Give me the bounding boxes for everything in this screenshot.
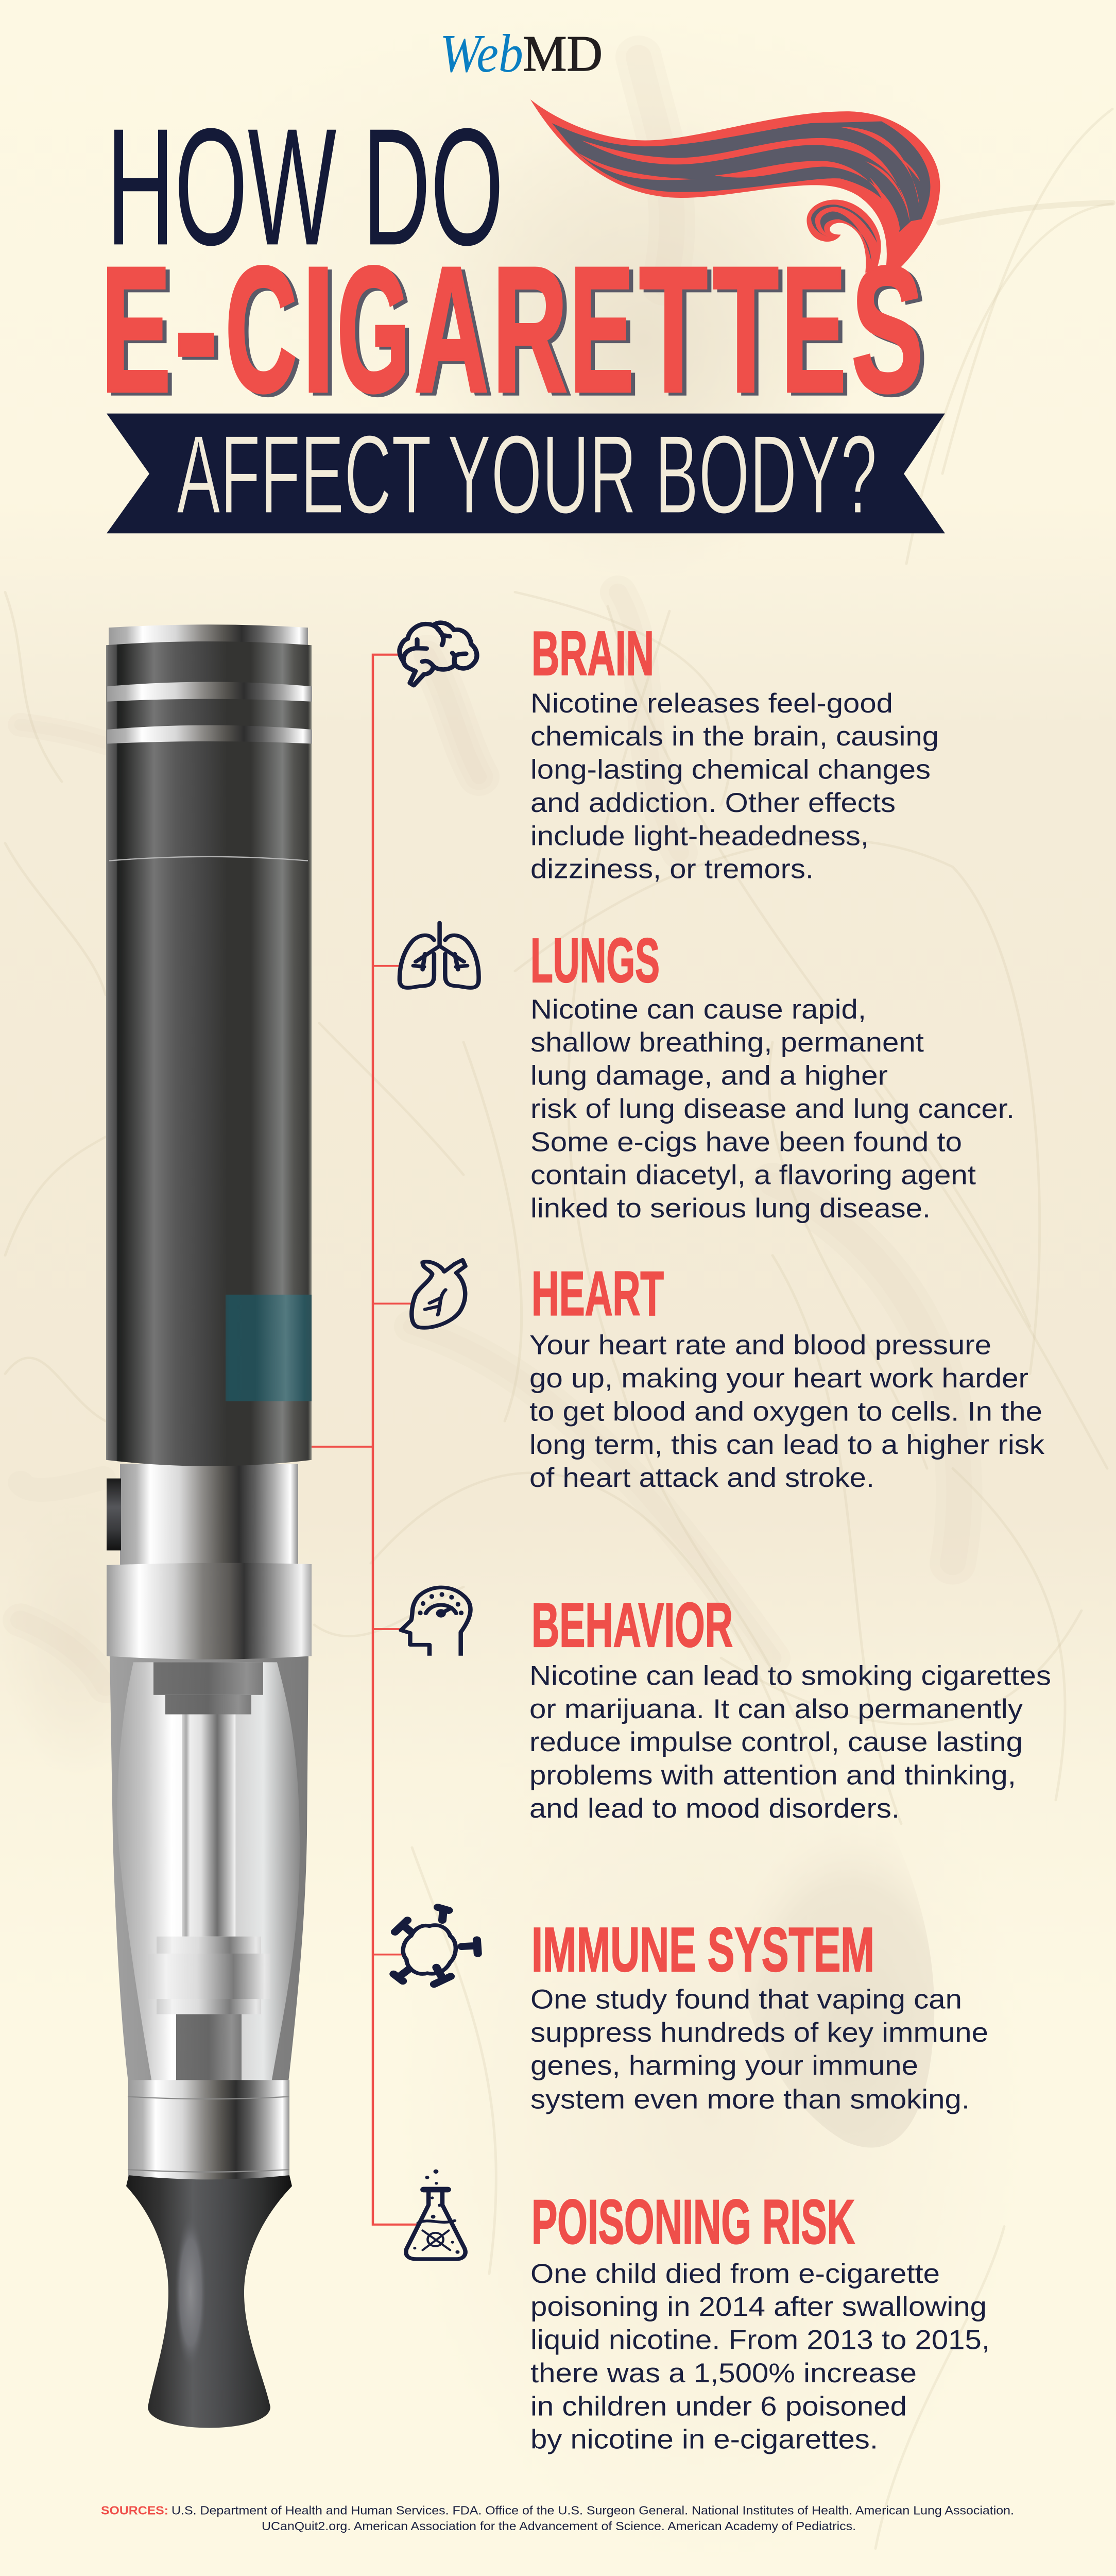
smoke swirl illustration <box>530 99 940 273</box>
title: e-cigarettes: C <box>225 229 297 429</box>
text: behavior: reduce impulse control, cause lasting <box>529 1726 1023 1757</box>
text: lungs: linked to serious lung disease. <box>530 1193 931 1223</box>
text: immune system: suppress hundreds of key immune <box>530 2017 988 2047</box>
icon: brain <box>400 623 477 685</box>
title: e-cigarettes: E <box>570 229 634 429</box>
upper inner fitting <box>153 1662 263 1695</box>
title: e-cigarettes: S <box>851 229 923 429</box>
title: e-cigarettes: G <box>341 232 414 432</box>
title: e-cigarettes: E <box>574 232 638 432</box>
text: brain: and addiction. Other effects <box>530 787 896 818</box>
icon: head with gauge <box>401 1587 471 1656</box>
sources <box>101 2504 1014 2533</box>
mouthpiece <box>126 2175 292 2428</box>
panel: immune system <box>393 1907 988 2114</box>
text: lungs: Some e-cigs have been found to <box>530 1126 962 1157</box>
text: poisoning risk: in children under 6 poisoned <box>530 2391 907 2421</box>
icon: lungs <box>400 923 479 988</box>
text: brain: dizziness, or tremors. <box>530 854 814 884</box>
text: immune system: system even more than smoking. <box>530 2084 970 2114</box>
ring 2 <box>107 725 312 744</box>
heading: brain: BRAIN <box>531 618 654 688</box>
heading: lungs: LUNGS <box>530 925 660 995</box>
side button <box>107 1479 121 1550</box>
title: e-cigarettes: S <box>855 232 928 432</box>
neck <box>120 1464 298 1567</box>
text: lungs: shallow breathing, permanent <box>530 1027 924 1058</box>
title: e-cigarettes: G <box>337 229 410 429</box>
battery body <box>106 641 312 1466</box>
panel: lungs <box>400 923 1015 1223</box>
title: how do: HOW DO <box>107 94 504 280</box>
ring 1 <box>107 682 312 702</box>
text: brain <box>530 688 939 884</box>
panel: poisoning risk <box>406 2170 990 2454</box>
text: lungs: risk of lung disease and lung cancer. <box>530 1093 1015 1124</box>
center tube <box>182 1715 236 1937</box>
title: e-cigarettes: T <box>717 232 783 432</box>
collar <box>107 1563 312 1659</box>
icon: virus <box>393 1907 478 1984</box>
title: e-cigarettes: I <box>306 232 339 432</box>
coil fitting <box>157 1937 261 2014</box>
glass highlight <box>117 1662 300 2082</box>
title: e-cigarettes: A <box>418 232 493 432</box>
seam <box>109 857 308 861</box>
sources: SOURCES: <box>101 2504 168 2517</box>
text: lungs <box>530 994 1015 1223</box>
glass tank <box>110 1653 308 2082</box>
base band <box>128 2080 289 2182</box>
title: e-cigarettes: R <box>492 229 568 429</box>
title: e-cigarettes: R <box>496 232 572 432</box>
title: e-cigarettes: I <box>302 229 335 429</box>
icon: flask with skull <box>406 2170 466 2259</box>
teal window <box>226 1295 312 1401</box>
text: immune system <box>530 1984 988 2114</box>
title: e-cigarettes: - <box>178 232 222 432</box>
text: immune system: One study found that vaping can <box>530 1984 962 2014</box>
title: e-cigarettes: A <box>414 229 489 429</box>
logo: WebMD: Web <box>440 23 523 83</box>
panel: behavior <box>401 1587 1051 1823</box>
top cap <box>109 624 308 645</box>
heading: poisoning risk: POISONING RISK <box>531 2187 855 2257</box>
heading: immune system: IMMUNE SYSTEM <box>531 1914 874 1985</box>
title: e-cigarettes: T <box>639 229 708 429</box>
text: behavior: or marijuana. It can also permanently <box>529 1693 1023 1724</box>
text: lungs: contain diacetyl, a flavoring agent <box>530 1160 976 1190</box>
text: brain: chemicals in the brain, causing <box>530 721 939 752</box>
text: behavior: Nicotine can lead to smoking cigarettes <box>529 1660 1051 1691</box>
text: behavior <box>529 1660 1051 1823</box>
text: poisoning risk <box>530 2258 990 2454</box>
title: e-cigarettes: T <box>643 232 712 432</box>
text: heart: Your heart rate and blood pressure <box>529 1330 991 1360</box>
illustration: e-cigarette <box>106 624 312 2428</box>
text: immune system: genes, harming your immune <box>530 2050 918 2081</box>
title: e-cigarettes <box>101 229 928 432</box>
sources: U.S. Department of Health and Human Services. FDA. Office of the U.S. Surgeon General. National Institutes of Health. American Lung Association. <box>171 2504 1014 2517</box>
text: heart <box>529 1330 1045 1493</box>
sources: UCanQuit2.org. American Association for the Advancement of Science. American Academy of Pediatrics. <box>262 2520 856 2533</box>
text: brain: Nicotine releases feel-good <box>530 688 893 718</box>
title: e-cigarettes: E <box>105 232 175 432</box>
text: poisoning risk: there was a 1,500% increase <box>530 2358 917 2388</box>
text: brain: include light-headedness, <box>530 820 869 851</box>
text: lungs: Nicotine can cause rapid, <box>530 994 866 1024</box>
text: heart: go up, making your heart work harder <box>529 1363 1028 1394</box>
text: heart: to get blood and oxygen to cells. In the <box>529 1396 1042 1427</box>
title: e-cigarettes: C <box>229 232 301 432</box>
panel: heart <box>411 1258 1045 1493</box>
title: e-cigarettes: E <box>781 229 846 429</box>
title: e-cigarettes: E <box>101 229 171 429</box>
logo: WebMD: MD <box>523 26 603 82</box>
text: behavior: problems with attention and thinking, <box>529 1760 1016 1790</box>
text: lungs: lung damage, and a higher <box>530 1060 888 1091</box>
text: brain: long-lasting chemical changes <box>530 754 931 785</box>
text: heart: long term, this can lead to a higher risk <box>529 1429 1045 1460</box>
text: poisoning risk: One child died from e-cigarette <box>530 2258 940 2289</box>
lower block <box>176 2014 242 2084</box>
panel: brain <box>400 618 939 884</box>
icon: heart <box>411 1260 466 1328</box>
title: e-cigarettes: E <box>785 232 850 432</box>
heading: heart: HEART <box>531 1258 664 1328</box>
text: behavior: and lead to mood disorders. <box>529 1793 900 1823</box>
text: poisoning risk: liquid nicotine. From 2013 to 2015, <box>530 2325 990 2355</box>
heading: behavior: BEHAVIOR <box>531 1590 733 1660</box>
text: poisoning risk: by nicotine in e-cigarettes. <box>530 2424 878 2454</box>
text: poisoning risk: poisoning in 2014 after swallowing <box>530 2291 987 2322</box>
connector lines <box>312 655 418 2225</box>
title: e-cigarettes: - <box>174 229 218 429</box>
title: e-cigarettes: T <box>713 229 779 429</box>
text: heart: of heart attack and stroke. <box>529 1462 874 1493</box>
logo: WebMD <box>440 23 603 83</box>
